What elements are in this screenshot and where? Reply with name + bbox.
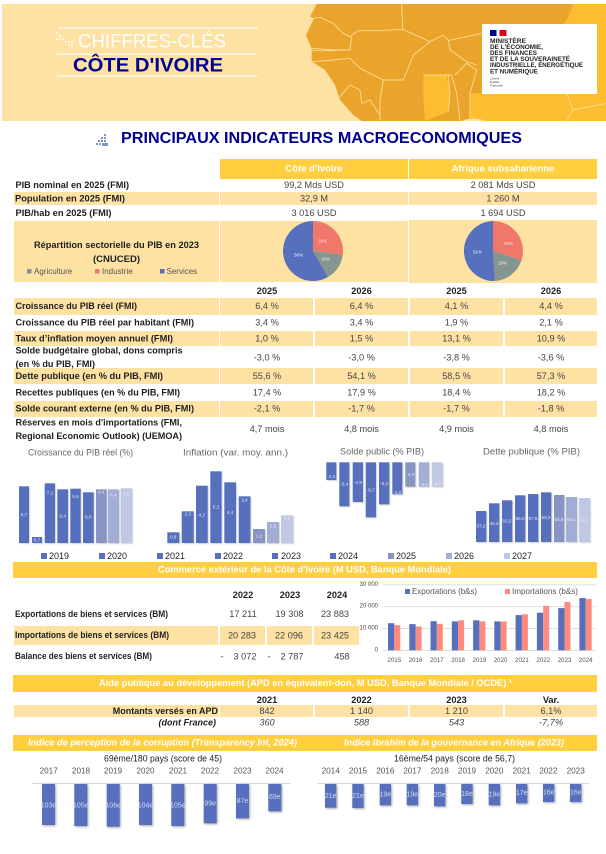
- row: PIB nominal: 99,2 Mds USD: [284, 180, 344, 190]
- chart: croissance: Croissance du PIB réel (%): [28, 448, 133, 458]
- chart: inflation: 1,0: [256, 534, 263, 538]
- ministry logo: DES FINANCES: [490, 50, 537, 57]
- table: commerce: 22 096: [275, 630, 303, 640]
- chart: croissance: 0,7: [34, 538, 41, 542]
- table: commerce: 2024: [327, 590, 348, 600]
- ministry logo: Égalité: [490, 79, 500, 84]
- row: croissance par habitant: 1,9 %: [445, 318, 468, 328]
- year headers: 2025: [257, 286, 277, 296]
- chart: inflation: 5,2: [213, 504, 220, 510]
- chart: governance ranking: 2020: [485, 766, 504, 776]
- chart: governance ranking: 2014: [322, 766, 340, 776]
- shared chart legend: 2020: [107, 551, 127, 561]
- chart: exportations et importations: 30 000: [360, 582, 379, 588]
- shared chart legend: 2026: [454, 551, 474, 561]
- chart: inflation: [167, 448, 293, 543]
- row: réserves: 4,9 mois: [439, 424, 474, 434]
- table: commerce: 2022: [233, 590, 253, 600]
- chart: corruption ranking: 2020: [136, 766, 155, 776]
- row: dette publique: 54,1 %: [347, 371, 376, 381]
- chart: croissance: 6,5: [72, 494, 79, 499]
- table: commerce: -: [220, 652, 224, 662]
- row: réserves: 4,8 mois: [344, 424, 379, 434]
- year headers: 2025: [446, 286, 467, 296]
- row: PIB par habitant: [16, 208, 526, 218]
- chart: croissance: 7,1: [47, 490, 54, 496]
- section: indices heading: [13, 735, 597, 751]
- row: solde courant: Solde courant externe (en % du PIB, FMI): [16, 404, 194, 414]
- row fills: [14, 298, 597, 417]
- row: solde budgétaire: -3,6 %: [538, 352, 564, 362]
- row: solde courant: -1,7 %: [443, 404, 470, 414]
- chart: exportations et importations: 2016: [409, 657, 423, 664]
- table: aide publique: 1 210: [445, 706, 468, 716]
- chart: dette publique: 52,7: [580, 518, 589, 522]
- chart: solde public: -4,0: [393, 490, 402, 495]
- pixel decoration: [56, 32, 73, 49]
- chart: solde public: -6,7: [367, 488, 375, 492]
- row: inflation: 1,0 %: [255, 334, 279, 344]
- header banner: [2, 4, 606, 121]
- row: inflation: Taux d’inflation moyen annuel (FMI): [16, 334, 173, 344]
- chart: exportations et importations: 0: [375, 647, 379, 653]
- row: croissance par habitant: 3,4 %: [350, 318, 373, 328]
- table: aide publique: 543: [449, 718, 465, 728]
- chart: exportations et importations: 2022: [536, 657, 551, 664]
- chart: croissance: [19, 448, 133, 543]
- row: solde courant: -1,8 %: [538, 404, 564, 414]
- year headers: [257, 286, 561, 296]
- chart: governance ranking: 2018: [431, 766, 449, 776]
- icon: dots: [96, 134, 108, 146]
- table: aide publique: 588: [354, 718, 370, 728]
- row: croissance: 6,4 %: [350, 301, 373, 311]
- chart: exportations et importations: 2021: [515, 657, 529, 664]
- row: solde budgétaire: -3,0 %: [348, 352, 375, 362]
- row: solde budgétaire: (en % du PIB, FMI): [16, 359, 95, 369]
- chart: exportations et importations: [360, 582, 596, 664]
- pie legend: Services: [166, 267, 197, 276]
- row: PIB par habitant: 3 016 USD: [292, 208, 337, 218]
- chart: governance ranking: 21e: [352, 793, 364, 800]
- chart: solde public: -5,2: [380, 481, 389, 486]
- chart: corruption ranking: 2023: [233, 766, 252, 776]
- chart: solde public: -3,0: [406, 472, 415, 477]
- ministry logo: ET DE LA SOUVERAINETÉ: [490, 55, 570, 63]
- chart: governance ranking: 21e: [325, 793, 337, 800]
- row: dette publique: 57,3 %: [537, 371, 565, 381]
- chart: corruption ranking: 87e: [237, 798, 248, 805]
- table: aide publique: -7,7%: [539, 718, 563, 728]
- row: croissance par habitant: 2,1 %: [539, 318, 563, 328]
- chart: exportations et importations: 10 000: [360, 625, 379, 631]
- ministry logo: Liberté: [490, 76, 500, 80]
- table: commerce: 17 211: [229, 609, 257, 619]
- year headers: 2026: [351, 286, 372, 296]
- row: dette publique: Dette publique (en % du PIB, FMI): [16, 371, 163, 381]
- chart: corruption ranking: 69ème/180 pays (score de 45): [104, 754, 222, 764]
- row: inflation: [16, 334, 565, 344]
- table: commerce: -: [267, 652, 271, 662]
- header rule lines: [57, 28, 258, 77]
- row: croissance: Croissance du PIB réel (FMI): [16, 301, 137, 311]
- row: réserves: Réserves en mois d'importations (FMI,: [16, 418, 182, 428]
- ministry logo: Fraternité: [490, 84, 503, 88]
- row: réserves: Regional Economic Outlook) (UEMOA): [16, 431, 182, 441]
- table: commerce: 20 283: [228, 630, 256, 640]
- chart: governance ranking: 16e: [570, 790, 582, 796]
- chart: governance ranking: 19e: [379, 792, 391, 798]
- chart: croissance: 6,7: [21, 512, 28, 517]
- section: indices heading: Indice Ibrahim de la gouvernance en Afrique (2023): [344, 738, 564, 748]
- chart: corruption ranking: 105e: [170, 802, 186, 810]
- shared chart legend: 2025: [396, 551, 416, 561]
- pie: Afrique subsaharienne: [464, 221, 523, 281]
- section: indices heading: Indice de perception de la corruption (Transparency Int, 2024): [28, 738, 297, 748]
- column headers: Côte d'Ivoire: [285, 164, 343, 174]
- pie: Afrique subsaharienne: 51%: [473, 250, 482, 254]
- chart: solde public: -5,4: [340, 482, 349, 486]
- chart: exportations et importations: 2023: [558, 657, 572, 664]
- row: réserves: 4,8 mois: [534, 424, 569, 434]
- panel: sector breakdown: [14, 220, 597, 283]
- row: solde budgétaire: [16, 346, 564, 369]
- chart: dette publique: 57,5: [529, 516, 538, 521]
- row: inflation: 10,9 %: [537, 334, 565, 344]
- pie legend: Agriculture: [34, 267, 73, 276]
- table: commerce: 3 072: [234, 652, 256, 662]
- table: commerce: 23 883: [321, 609, 349, 619]
- row: PIB par habitant: PIB/hab en 2025 (FMI): [16, 208, 112, 218]
- row: PIB par habitant: 1 694 USD: [481, 208, 526, 218]
- chart: corruption ranking: 2018: [72, 766, 91, 776]
- chart: dette publique: Dette publique (% PIB): [483, 446, 580, 458]
- row: population: Population en 2025 (FMI): [15, 194, 125, 204]
- section: aide publique: [13, 675, 597, 692]
- chart: solde public: -3,0: [433, 481, 442, 486]
- table: aide publique: 360: [259, 718, 276, 728]
- chart: governance ranking: 2019: [458, 766, 477, 776]
- chart: solde public: -4,9: [354, 480, 362, 485]
- chart: solde public: -3,0: [420, 482, 428, 487]
- chart: exportations et importations: Exportations (b&s): [412, 587, 477, 596]
- pie: Côte d'Ivoire: 58%: [294, 252, 303, 258]
- ministry logo: MINISTÈRE: [490, 37, 526, 45]
- row: recettes publiques: 17,9 %: [347, 388, 376, 398]
- table: commerce: [14, 590, 359, 662]
- row: solde courant: [16, 404, 564, 414]
- table: commerce: Exportations de biens et services (BM): [15, 609, 168, 619]
- row: dette publique: 55,6 %: [253, 371, 281, 381]
- row: inflation: 1,5 %: [350, 334, 373, 344]
- chart: corruption ranking: 106e: [105, 802, 121, 810]
- table: aide publique: (dont France): [158, 718, 216, 728]
- table: commerce: 23 425: [321, 630, 349, 640]
- chart: governance ranking: 2021: [513, 766, 531, 776]
- chart: inflation: 1,5: [270, 524, 277, 528]
- pie: Côte d'Ivoire: 26%: [318, 238, 327, 244]
- shared chart legend: [41, 551, 532, 561]
- row: recettes publiques: Recettes publiques (en % du PIB, FMI): [16, 388, 180, 398]
- row: solde budgétaire: -3,0 %: [254, 352, 280, 362]
- table: commerce: 2023: [280, 590, 300, 600]
- chart: inflation: 3,4: [241, 498, 248, 502]
- row: recettes publiques: 18,2 %: [537, 388, 565, 398]
- row: croissance: [16, 301, 563, 311]
- row: population: [14, 192, 597, 205]
- main title: PRINCIPAUX INDICATEURS MACROECONOMIQUES: [121, 130, 522, 147]
- ministry logo: [482, 24, 597, 94]
- panel: sector breakdown: (CNUCED): [93, 254, 140, 264]
- table: commerce: 19 308: [275, 609, 304, 619]
- table: commerce: 458: [334, 652, 350, 662]
- table: aide publique: 842: [259, 706, 275, 716]
- chart: dette publique: 55,6: [555, 517, 564, 522]
- chart: corruption ranking: 2019: [104, 766, 123, 776]
- chart: exportations et importations: 2019: [473, 657, 487, 664]
- chart: dette publique: 50,2: [503, 518, 512, 524]
- table: commerce: Balance des biens et services (BM): [15, 651, 152, 661]
- pie legend: Industrie: [102, 267, 133, 276]
- chart: governance ranking: [317, 754, 589, 808]
- chart: governance ranking: 2017: [403, 766, 422, 776]
- row: croissance: 6,4 %: [255, 301, 279, 311]
- row: population: 32,9 M: [300, 194, 328, 204]
- chart: exportations et importations: 2024: [579, 657, 593, 664]
- chart: governance ranking: 2015: [349, 766, 368, 776]
- chart: exportations et importations: 2015: [387, 657, 402, 664]
- chart: dette publique: 56,0: [516, 516, 525, 521]
- row: PIB nominal: [16, 180, 536, 190]
- chart: inflation: 4,4: [227, 510, 234, 515]
- chart: exportations et importations: Importations (b&s): [512, 587, 578, 596]
- chart: corruption ranking: 99e: [204, 800, 216, 808]
- column headers: Afrique subsaharienne: [452, 164, 554, 174]
- table: aide publique: 6,1%: [541, 706, 561, 716]
- chart: governance ranking: 16e: [543, 790, 555, 796]
- map of West Africa: [306, 4, 606, 121]
- shared chart legend: 2022: [223, 551, 243, 561]
- chart: croissance: 6,4: [98, 490, 105, 494]
- table: commerce: Importations de biens et services (BM): [15, 630, 169, 640]
- table: aide publique: 2023: [446, 695, 467, 705]
- chart: corruption ranking: 104e: [138, 802, 153, 810]
- chart: exportations et importations: 2017: [430, 657, 444, 664]
- chart: governance ranking: 20e: [434, 792, 446, 799]
- row: recettes publiques: [16, 388, 565, 398]
- table: key indicators: [14, 159, 597, 441]
- year headers: 2026: [541, 286, 561, 296]
- table: aide publique: Montants versés en APD: [113, 706, 218, 716]
- row: recettes publiques: 17,4 %: [253, 388, 281, 398]
- chart: dette publique: 54,1: [567, 517, 576, 522]
- chart: inflation: 0,8: [170, 534, 177, 540]
- chart: dette publique: 37,2: [477, 524, 486, 528]
- row: solde budgétaire: Solde budgétaire global, dons compris: [16, 346, 182, 356]
- ministry logo: INDUSTRIELLE, ÉNERGÉTIQUE: [490, 61, 583, 69]
- row: solde courant: -2,1 %: [254, 404, 280, 414]
- chart: corruption ranking: 2024: [265, 766, 284, 776]
- row: PIB nominal: 2 081 Mds USD: [471, 180, 536, 190]
- panel: sector breakdown: Répartition sectorielle du PIB en 2023: [34, 240, 199, 250]
- table: aide publique: 2022: [351, 695, 372, 705]
- column headers: [220, 159, 597, 179]
- chart: governance ranking: 18e: [461, 791, 473, 798]
- kicker: CHIFFRES-CLÉS: [78, 32, 226, 52]
- table: commerce: 2 787: [280, 652, 304, 662]
- chart: croissance: 6,4: [60, 514, 66, 518]
- chart: governance ranking: 17e: [516, 790, 528, 797]
- shared chart legend: 2027: [512, 551, 532, 561]
- chart: corruption ranking: 105e: [73, 802, 89, 810]
- row: croissance par habitant: 3,4 %: [255, 318, 279, 328]
- chart: exportations et importations: 2020: [494, 657, 508, 664]
- chart: inflation: 2,0: [284, 516, 291, 520]
- chart: corruption ranking: 2022: [201, 766, 220, 776]
- shared chart legend: 2023: [281, 551, 301, 561]
- shared chart legend: 2024: [338, 551, 358, 561]
- table: aide publique: 1 140: [350, 706, 373, 716]
- shared chart legend: 2019: [49, 551, 69, 561]
- chart: governance ranking: 19e: [406, 792, 418, 798]
- chart: croissance: 6,4: [110, 492, 117, 498]
- row: solde budgétaire: -3,8 %: [443, 352, 470, 362]
- section: commerce extérieur: [13, 562, 597, 578]
- chart: corruption ranking: 2017: [40, 766, 58, 776]
- row: inflation: 13,1 %: [442, 334, 471, 344]
- pie: Côte d'Ivoire: 16%: [321, 256, 330, 262]
- chart: governance ranking: 19e: [488, 792, 500, 798]
- row: dette publique: 58,5 %: [442, 371, 471, 381]
- row: population: 1 260 M: [486, 194, 520, 204]
- chart: exportations et importations: 20 000: [360, 604, 379, 610]
- chart: inflation: Inflation (var. moy. ann.): [183, 448, 288, 458]
- chart: corruption ranking: 2021: [169, 766, 188, 776]
- chart: exportations et importations: 2018: [451, 657, 466, 664]
- shared chart legend: 2021: [165, 551, 185, 561]
- row: croissance par habitant: Croissance du PIB réel par habitant (FMI): [16, 318, 194, 328]
- chart: solde public: [326, 446, 443, 517]
- chart: inflation: 4,2: [199, 512, 205, 518]
- chart: dette publique: 46,3: [490, 521, 499, 526]
- chart: corruption ranking: 103e: [41, 802, 56, 810]
- row: recettes publiques: 18,4 %: [442, 388, 471, 398]
- chart: governance ranking: 16ème/54 pays (score de 56,7): [394, 754, 515, 764]
- row: croissance: 4,4 %: [539, 301, 563, 311]
- row: PIB nominal: PIB nominal en 2025 (FMI): [16, 180, 129, 190]
- chart: croissance: 6,5: [123, 492, 130, 496]
- chart: dette publique: [476, 446, 590, 542]
- ministry logo: DE L'ÉCONOMIE,: [490, 43, 543, 51]
- pie: Afrique subsaharienne: 30%: [504, 241, 513, 246]
- row: réserves: 4,7 mois: [250, 424, 285, 434]
- chart: croissance: 6,0: [85, 514, 92, 520]
- row: solde courant: -1,7 %: [348, 404, 375, 414]
- section: commerce extérieur: Commerce extérieur de la Côte d'Ivoire (M USD, Banque Mondiale): [158, 564, 451, 576]
- chart: governance ranking: 2022: [539, 766, 558, 776]
- row: dette publique: [16, 371, 565, 381]
- chart: corruption ranking: 69e: [269, 794, 281, 801]
- table: aide publique: 2021: [257, 695, 277, 705]
- row: croissance par habitant: [16, 318, 563, 328]
- row: croissance: 4,1 %: [445, 301, 468, 311]
- country name: CÔTE D'IVOIRE: [73, 54, 223, 76]
- chart: corruption ranking: [32, 754, 291, 827]
- chart: inflation: 2,3: [185, 512, 191, 516]
- table: aide publique: [14, 695, 597, 728]
- pie: Côte d'Ivoire: [283, 221, 343, 281]
- chart: solde public: -2,2: [327, 474, 336, 479]
- chart: governance ranking: 2023: [567, 766, 585, 776]
- section: aide publique: Aide publique au développement (APD en équivalent-don, M USD, Banque Mondiale / OCDE) ¹: [99, 678, 512, 689]
- chart: governance ranking: 2016: [376, 766, 395, 776]
- pie: Afrique subsaharienne: 19%: [498, 260, 507, 266]
- chart: dette publique: 59,3: [542, 515, 551, 520]
- table: aide publique: Var.: [543, 695, 559, 705]
- ministry logo: ET NUMÉRIQUE: [490, 68, 538, 76]
- row: réserves: [16, 418, 569, 441]
- pie legend: [27, 267, 197, 276]
- chart: solde public: Solde public (% PIB): [340, 446, 424, 458]
